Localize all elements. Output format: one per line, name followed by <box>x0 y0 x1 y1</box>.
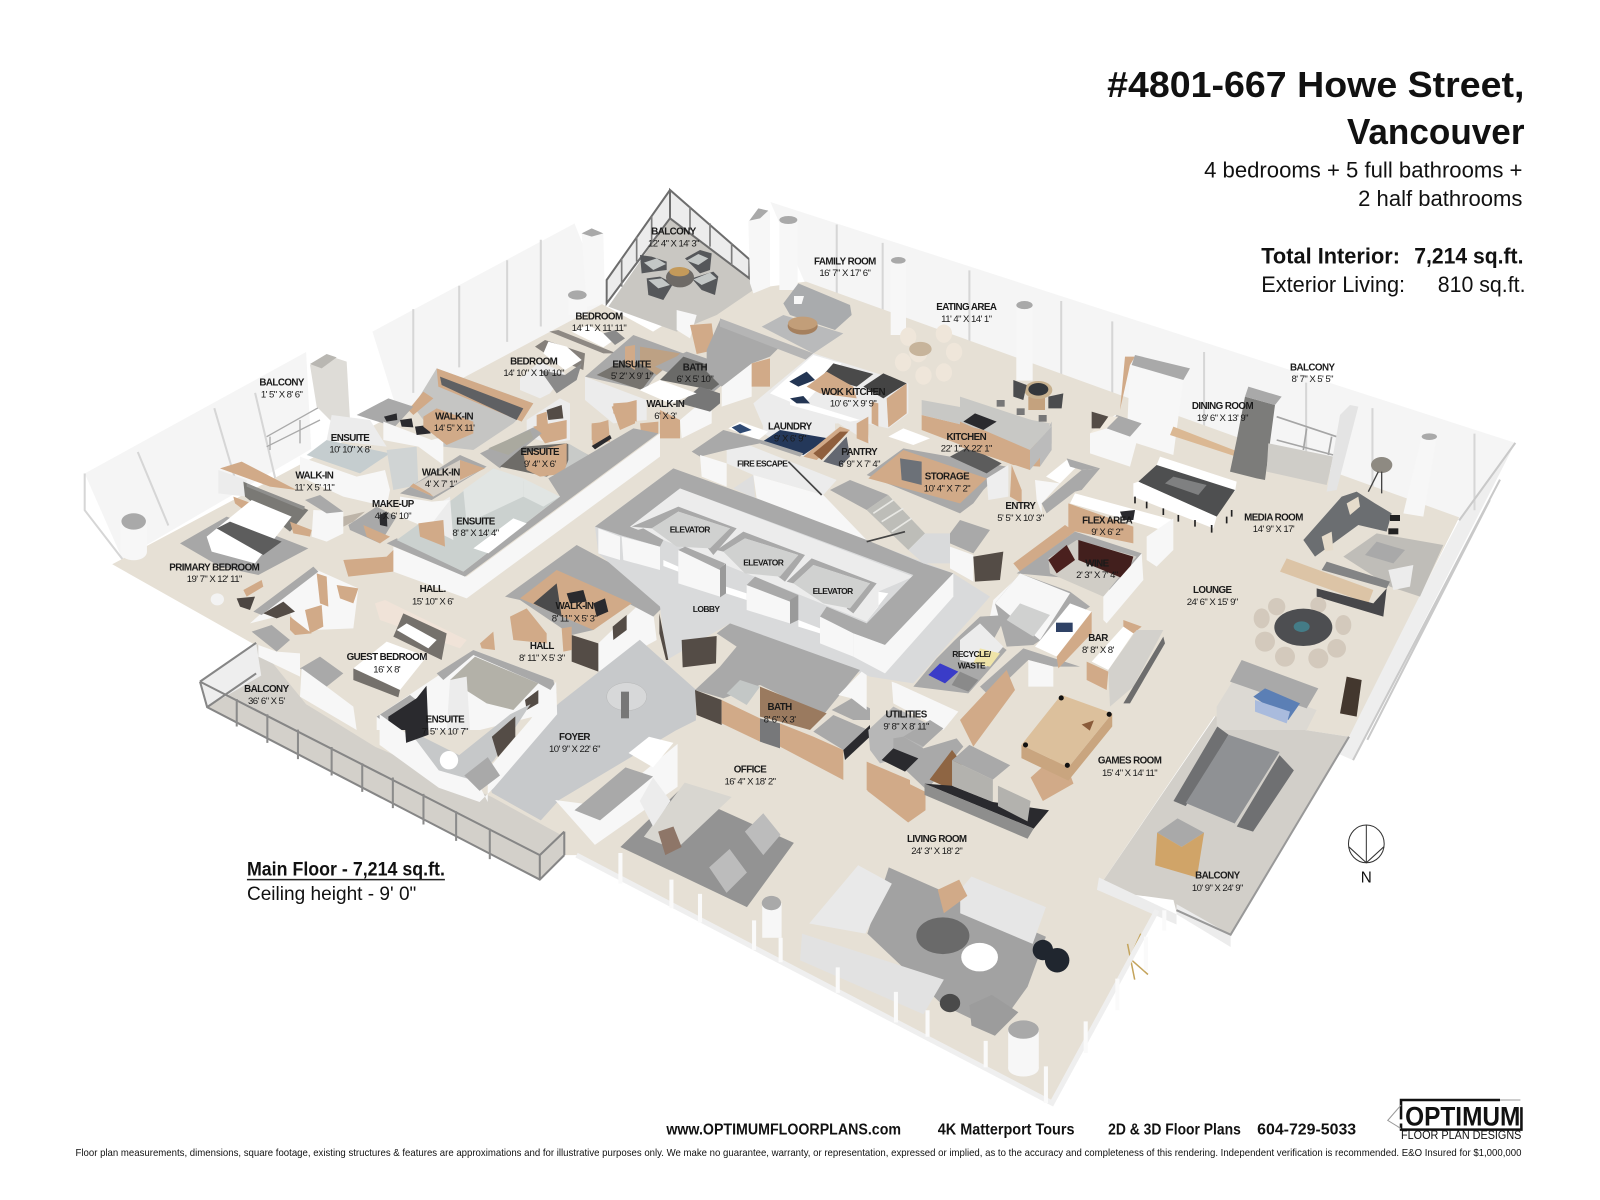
label: hall 8'11: 8' 11" X 5' 3" <box>519 653 565 664</box>
office furniture <box>620 778 794 907</box>
title block <box>1107 65 1526 297</box>
area totals: Exterior Living: <box>1261 272 1405 297</box>
label: dining room: DINING ROOM <box>1192 401 1253 412</box>
balcony deck: south-east <box>1097 716 1349 947</box>
pantry <box>803 427 850 467</box>
label: make-up: MAKE-UP <box>372 499 414 510</box>
address heading <box>1107 65 1525 152</box>
fire escape and laundry walls <box>692 430 867 540</box>
tall white block <box>1120 355 1190 455</box>
label: living room: 24' 3" X 18' 2" <box>911 846 962 857</box>
floor lamp stand <box>1120 934 1148 980</box>
label: family room: FAMILY ROOM <box>814 256 876 267</box>
primary bedroom <box>180 462 365 575</box>
service room and recycle <box>913 575 1080 747</box>
label: ensuite 5'2: 5' 2" X 9' 1" <box>611 371 653 382</box>
label: walk-in 8'11: 8' 11" X 5' 3" <box>552 613 597 624</box>
columns over the floor <box>120 301 1039 1077</box>
label: pantry: 6' 9" X 7' 4" <box>838 459 880 470</box>
label: fire escape: FIRE ESCAPE <box>737 458 788 468</box>
label: laundry: 9' X 6' 9" <box>774 433 806 444</box>
central north wall block <box>677 310 813 407</box>
crop group: central core <box>595 400 1080 790</box>
living room rug and sofas <box>800 865 1069 1036</box>
label: hall 15'10: HALL. <box>420 584 446 595</box>
label: walk-in 14'5: 14' 5" X 11' <box>434 423 475 434</box>
label: ensuite 10'10: ENSUITE <box>331 433 369 444</box>
bedroom and bathroom count <box>1204 158 1522 211</box>
address heading: #4801-667 Howe Street, <box>1107 65 1524 105</box>
label: eating area: 11' 4" X 14' 1" <box>941 314 992 325</box>
label: walk-in 14'5: WALK-IN <box>435 411 473 422</box>
panel: floor plan render <box>85 190 1515 1103</box>
wine room <box>1013 525 1143 623</box>
label: foyer: FOYER <box>559 732 590 743</box>
label: walk-in 11': 11' X 5' 11" <box>294 482 334 493</box>
primary closet <box>250 567 358 730</box>
glass walls <box>85 202 1515 760</box>
lobby and corridor floor <box>595 468 990 683</box>
label: elevator 1: ELEVATOR <box>670 525 710 535</box>
label: living room: LIVING ROOM <box>907 834 967 845</box>
icon: north arrow <box>1348 825 1384 887</box>
balcony deck and rail <box>1267 417 1337 485</box>
label: walk-in 6': WALK-IN <box>646 399 684 410</box>
lower utility wood and fireplace console <box>867 745 1049 839</box>
thick diagonal wall <box>387 428 660 598</box>
label: ensuite 7'5: 7' 5" X 10' 7" <box>422 727 468 738</box>
logo: Optimum Floor Plan Designs: FLOOR PLAN DESIGNS <box>1401 1128 1521 1142</box>
icon: north arrow: N <box>1361 870 1372 887</box>
label: balcony 36'6: 36' 6" X 5' <box>248 696 285 707</box>
label: walk-in 6': 6' X 3' <box>654 411 677 422</box>
area totals: 7,214 sq.ft. <box>1414 243 1523 268</box>
balcony deck: south-west <box>200 643 564 880</box>
label: kitchen: KITCHEN <box>947 432 986 443</box>
label: entry: 5' 5" X 10' 3" <box>997 513 1044 524</box>
footer contact line: 2D & 3D Floor Plans <box>1108 1122 1241 1139</box>
label: balcony 1'5: BALCONY <box>259 378 304 389</box>
ensuite 9'4 x 6' <box>480 427 588 477</box>
label: walk-in 8'11: WALK-IN <box>556 601 593 612</box>
label: ensuite 10'10: 10' 10" X 8' <box>329 445 371 456</box>
label: lounge: LOUNGE <box>1193 585 1231 596</box>
label: storage: STORAGE <box>925 472 969 483</box>
service room and bar counter <box>995 573 1092 668</box>
label: recycle and waste: RECYCLE/ <box>952 649 991 659</box>
wood closet doors and hall closet near bedroom <box>527 398 637 447</box>
main floor caption: Ceiling height - 9' 0" <box>247 883 416 905</box>
bedroom and bathroom count: 2 half bathrooms <box>1358 186 1522 211</box>
bath 8'6 x 3' block <box>695 623 870 780</box>
label: family room: 16' 7" X 17' 6" <box>819 268 871 279</box>
footer contact line: 604-729-5033 <box>1257 1122 1356 1139</box>
primary bedroom chair and lamp <box>211 580 263 610</box>
label: guest bedroom: 16' X 8' <box>373 664 401 675</box>
label: ensuite 8'8: 8' 8" X 14' 4" <box>452 528 499 539</box>
label: wine: WINE <box>1085 558 1109 569</box>
bath 6' x 5'10 and walk-in 6' <box>639 352 740 438</box>
logo: Optimum Floor Plan Designs <box>1388 1100 1521 1142</box>
outdoor dining table <box>1155 727 1294 878</box>
label: make-up: 4' X 6' 10" <box>375 511 411 522</box>
label: bedroom: BEDROOM <box>510 356 557 367</box>
foyer carpet <box>488 640 696 820</box>
label: bar: 8' 8" X 8' <box>1082 645 1115 656</box>
label: foyer: 10' 9" X 22' 6" <box>549 744 600 755</box>
label: office: 16' 4" X 18' 2" <box>724 777 776 788</box>
main floor caption: Main Floor - 7,214 sq.ft. <box>247 859 445 881</box>
label: walk-in 4': WALK-IN <box>422 468 460 479</box>
upper bedrooms <box>520 325 625 398</box>
ensuite 8'8 x 14'4 <box>397 468 560 572</box>
label: guest bedroom: GUEST BEDROOM <box>347 652 427 663</box>
lobby doors <box>659 613 717 667</box>
balcony recess rail <box>267 407 320 450</box>
lounge round table <box>1254 597 1351 668</box>
main floor caption <box>247 859 445 905</box>
kitchen island east end <box>960 397 1052 470</box>
family room <box>762 283 852 353</box>
label: recycle and waste: WASTE <box>958 660 986 670</box>
label: bath 8'6: BATH <box>767 702 792 713</box>
label: bath 6': BATH <box>683 362 707 373</box>
label: ensuite 9'4: 9' 4" X 6' <box>524 459 556 470</box>
area totals <box>1261 243 1526 297</box>
guest bedroom <box>353 600 495 697</box>
wall pier and column <box>1327 405 1437 517</box>
label: wine: 2' 3" X 7' 4" <box>1076 570 1118 581</box>
label: utilities: 9' 8" X 8' 11" <box>883 722 929 733</box>
label: walk-in 4': 4' X 7' 1" <box>425 479 457 490</box>
eating area table <box>895 324 962 385</box>
walk-in 8'11 x 5'3 <box>505 545 673 672</box>
wok kitchen <box>753 353 908 443</box>
ensuite 10'10 x 8' <box>300 415 418 507</box>
balcony triangle <box>607 190 753 332</box>
label: ensuite 9'4: ENSUITE <box>521 447 559 458</box>
footer contact line: www.OPTIMUMFLOORPLANS.com <box>665 1122 901 1139</box>
label: walk-in 11': WALK-IN <box>295 471 333 482</box>
label: primary bedroom: 19' 7" X 12' 11" <box>187 574 242 585</box>
label: storage: 10' 4" X 7' 2" <box>924 483 970 494</box>
kitchen island <box>922 400 1052 467</box>
label: eating area: EATING AREA <box>936 302 996 313</box>
legal disclaimer: Floor plan measurements, dimensions, square footage, existing structures & features are approximations and for illustrative purposes only. We make no guarantee, warranty, or representation, expressed or implied, as to the accuracy and completeness of this rendering. Independent verification is recommended. E&O Insured for $1,000,000 <box>76 1148 1522 1159</box>
logo: Optimum Floor Plan Designs: OPTIMUM <box>1405 1102 1520 1132</box>
label: balcony north: BALCONY <box>651 227 696 238</box>
laundry <box>728 400 835 457</box>
label: wok kitchen: 10' 6" X 9' 9" <box>830 399 876 410</box>
utilities <box>867 682 963 790</box>
pool table <box>1021 695 1112 801</box>
label: pantry: PANTRY <box>841 447 877 458</box>
room labels <box>169 227 1335 894</box>
ensuite 5'2 x 9'1 <box>585 335 683 442</box>
label: games room: GAMES ROOM <box>1098 755 1161 766</box>
label: bar: BAR <box>1088 633 1108 644</box>
label: laundry: LAUNDRY <box>768 422 812 433</box>
south window posts and low wall <box>577 853 1164 1103</box>
guest ensuite <box>377 650 557 730</box>
flex area <box>1035 458 1173 567</box>
label: hall 15'10: 15' 10" X 6' <box>412 597 454 608</box>
walk-in 4' x 7'1 and make-up <box>343 455 487 577</box>
columns and wall piers <box>568 208 906 335</box>
label: utilities: UTILITIES <box>886 709 927 720</box>
storage room <box>867 428 1022 513</box>
label: balcony north: 12' 4" X 14' 3" <box>648 238 699 249</box>
crop group: west rooms <box>180 354 673 730</box>
label: balcony 10'9: BALCONY <box>1195 871 1240 882</box>
dining table <box>1133 457 1237 533</box>
wall console and marble column <box>1170 387 1282 480</box>
label: elevator 3: ELEVATOR <box>813 586 853 596</box>
ring wall top of the lift core <box>595 468 953 645</box>
floor <box>112 282 1459 1103</box>
label: bedroom upper: 14' 1" X 11' 11" <box>572 323 626 334</box>
crop group: east rooms <box>960 355 1443 730</box>
label: flex area: FLEX AREA <box>1082 515 1132 526</box>
guest ensuite lower <box>380 682 557 802</box>
label: dining room: 19' 6" X 13' 9" <box>1197 413 1248 424</box>
label: primary bedroom: PRIMARY BEDROOM <box>169 562 259 573</box>
label: entry: ENTRY <box>1005 501 1035 512</box>
label: ensuite 5'2: ENSUITE <box>612 359 651 370</box>
bedroom and bathroom count: 4 bedrooms + 5 full bathrooms + <box>1204 158 1522 183</box>
foyer closet block <box>555 737 678 845</box>
label: hall 8'11: HALL <box>530 641 554 652</box>
label: bedroom: 14' 10" X 10' 10" <box>503 368 564 379</box>
address heading: Vancouver <box>1347 112 1525 152</box>
label: elevator 2: ELEVATOR <box>743 557 784 567</box>
label: lounge: 24' 6" X 15' 9" <box>1187 597 1238 608</box>
bar island <box>1087 620 1165 707</box>
media room <box>1280 457 1443 617</box>
label: bath 6': 6' X 5' 10" <box>677 374 713 385</box>
label: kitchen: 22' 1" X 22' 1" <box>941 444 992 455</box>
label: wok kitchen: WOK KITCHEN <box>821 387 885 398</box>
elevator cells <box>632 507 877 613</box>
entry wall and door <box>908 520 1003 582</box>
label: games room: 15' 4" X 14' 11" <box>1102 768 1157 779</box>
footer contact line <box>665 1122 1356 1139</box>
label: ensuite 7'5: ENSUITE <box>426 714 464 725</box>
footer contact line: 4K Matterport Tours <box>938 1122 1074 1139</box>
small round dining table <box>997 380 1063 422</box>
label: balcony 10'9: 10' 9" X 24' 9" <box>1192 883 1243 894</box>
label: balcony 8'7: 8' 7" X 5' 5" <box>1291 374 1333 385</box>
label: ensuite 8'8: ENSUITE <box>456 516 495 527</box>
foyer table <box>607 683 647 718</box>
crop group: north rooms <box>520 190 908 467</box>
wall blocks in front of elevators <box>598 528 953 673</box>
label: office: OFFICE <box>734 764 766 775</box>
label: balcony 36'6: BALCONY <box>244 684 289 695</box>
label: bedroom upper: BEDROOM <box>575 311 623 322</box>
grill block <box>1217 660 1362 730</box>
label: media room: MEDIA ROOM <box>1244 512 1303 523</box>
area totals: Total Interior: <box>1261 243 1400 268</box>
label: bath 8'6: 8' 6" X 3' <box>764 714 796 725</box>
label: lobby: LOBBY <box>693 604 720 614</box>
label: media room: 14' 9" X 17' <box>1253 524 1295 535</box>
counter by dining room <box>1090 412 1142 467</box>
label: flex area: 9' X 6' 2" <box>1091 527 1123 538</box>
area totals: 810 sq.ft. <box>1438 272 1526 297</box>
label: balcony 1'5: 1' 5" X 8' 6" <box>261 389 303 400</box>
walk-in 14'5 x 11' <box>357 368 533 465</box>
label: balcony 8'7: BALCONY <box>1290 362 1334 373</box>
marble pier <box>310 354 350 423</box>
